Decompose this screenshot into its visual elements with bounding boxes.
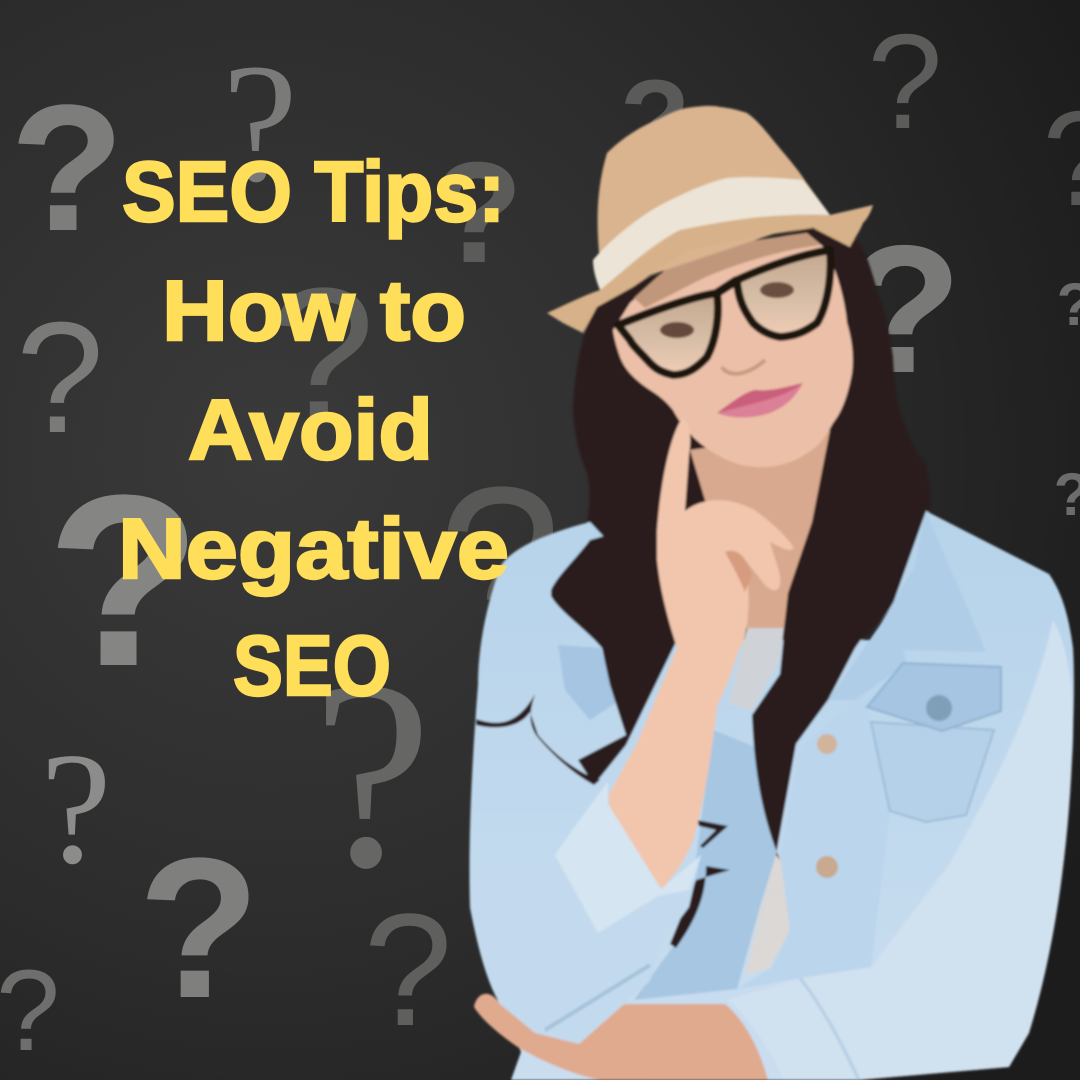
shirt	[729, 626, 790, 975]
title: Negative	[118, 502, 509, 597]
chalk question marks: ?	[138, 817, 260, 1040]
forearm and hand	[608, 418, 794, 889]
chalk question marks: ?	[848, 215, 962, 430]
woman	[469, 106, 1074, 1080]
left sleeve lower	[470, 855, 701, 1044]
jacket body	[469, 511, 1074, 1080]
hat	[547, 106, 873, 333]
title: Avoid	[188, 383, 433, 478]
sleeve seam	[545, 965, 650, 1030]
pocket flap	[867, 663, 1001, 731]
crossed arm	[474, 994, 768, 1080]
chalk question marks: ?	[620, 57, 690, 185]
buttons	[816, 695, 952, 878]
left cuff	[555, 781, 701, 933]
left chest pocket	[558, 645, 620, 720]
right placket	[737, 663, 907, 989]
title	[118, 145, 509, 714]
finger shadow	[725, 551, 752, 592]
chalk question marks: ?	[12, 74, 124, 287]
title: SEO	[233, 619, 391, 714]
hair back	[552, 228, 930, 760]
glasses	[618, 250, 830, 375]
mouth	[717, 383, 803, 418]
chalk question marks: ?	[867, 6, 943, 157]
chalk question marks: ?	[48, 453, 202, 742]
chalk question marks: ?	[269, 249, 375, 461]
collar shading	[828, 511, 986, 700]
nose	[722, 360, 765, 374]
chalk question marks: ?	[312, 625, 432, 924]
chalk question marks: ?	[439, 441, 561, 687]
chalk question marks: ?	[222, 29, 298, 217]
chest pocket	[867, 663, 1001, 822]
title: SEO Tips:	[122, 145, 505, 240]
hair strands	[476, 400, 922, 948]
chalk question marks: ?	[364, 880, 452, 1059]
forehead hat shadow	[634, 233, 820, 308]
hat crown	[598, 106, 830, 292]
inner denim panel	[634, 730, 776, 1000]
neck	[690, 430, 830, 628]
right sleeve	[727, 620, 1073, 1080]
chalk question marks: ?	[433, 138, 523, 308]
hat band	[593, 177, 830, 290]
chalk question marks: ?	[40, 719, 112, 897]
hat brim	[547, 205, 873, 333]
face	[613, 233, 853, 467]
chalk question marks: ?	[16, 290, 104, 466]
right cuff seam	[800, 978, 859, 1080]
title: How to	[162, 264, 466, 359]
